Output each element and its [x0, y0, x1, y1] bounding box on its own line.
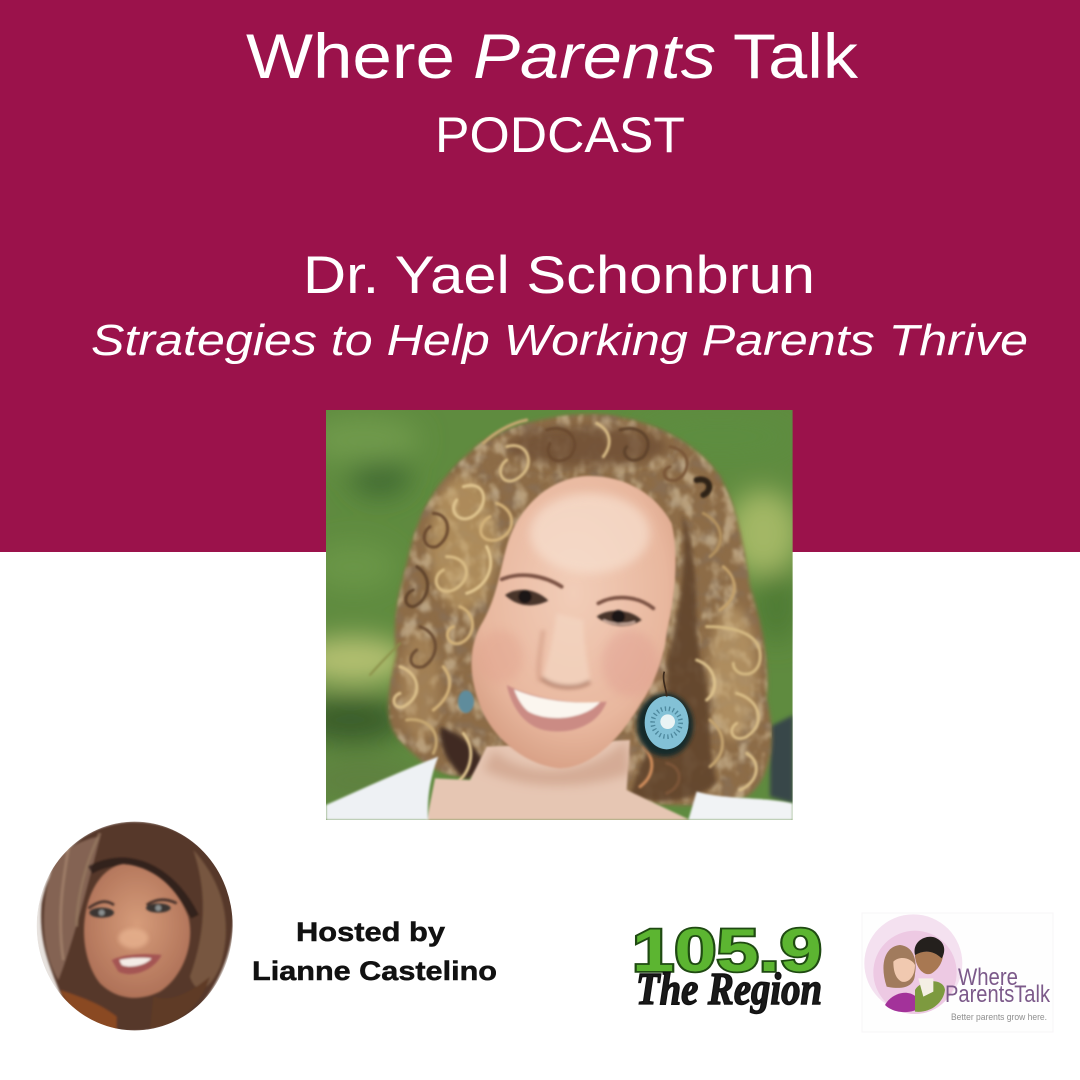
- logo: Where Parents Talk: Where: [958, 964, 1018, 991]
- grass background: [293, 410, 800, 820]
- episode title: Strategies to Help Working Parents Thrive: [91, 316, 1028, 365]
- host credit text: Hosted by: [296, 917, 445, 947]
- logo: 105.9 The Region: 105.9: [632, 917, 822, 984]
- maroon header panel: [0, 0, 1080, 552]
- host hair: [41, 822, 234, 1032]
- logo frame: [862, 913, 1053, 1032]
- title: Where Parents Talk: Talk: [733, 22, 859, 92]
- host credit text: [252, 917, 497, 986]
- portrait backdrop: [36, 822, 232, 996]
- curls: [370, 420, 760, 793]
- nose: [539, 613, 590, 687]
- face: [472, 476, 676, 768]
- title: Where Parents Talk: Parents: [473, 22, 716, 92]
- host circular portrait: [37, 822, 234, 1032]
- logo: Where Parents Talk: Better parents grow here.: [951, 1012, 1047, 1023]
- host eyes: [88, 900, 177, 918]
- logo couple illustration: [864, 914, 962, 1014]
- guest name: Dr. Yael Schonbrun: [303, 246, 815, 305]
- title: Where Parents Talk: Where: [246, 22, 455, 92]
- left earring: [458, 690, 474, 713]
- smile: [507, 685, 607, 732]
- eyes: [505, 590, 642, 626]
- guest photo illustration: [293, 410, 800, 820]
- host nose: [118, 928, 148, 948]
- host credit text: Lianne Castelino: [252, 956, 497, 986]
- neck and chest: [427, 740, 690, 820]
- hair mass: [388, 414, 772, 805]
- host smile: [112, 954, 162, 974]
- subtitle: PODCAST: PODCAST: [435, 107, 685, 163]
- logo: Where Parents Talk: [862, 913, 1053, 1032]
- logo: 105.9 The Region: [632, 917, 822, 1014]
- title: Where Parents Talk: [246, 22, 859, 92]
- logo: Where Parents Talk: ParentsTalk: [945, 981, 1051, 1008]
- right earring: [637, 672, 693, 757]
- eyebrows: [502, 575, 653, 608]
- logo: 105.9 The Region: The Region: [636, 963, 822, 1014]
- host face: [84, 864, 190, 998]
- white shirt: [326, 757, 793, 820]
